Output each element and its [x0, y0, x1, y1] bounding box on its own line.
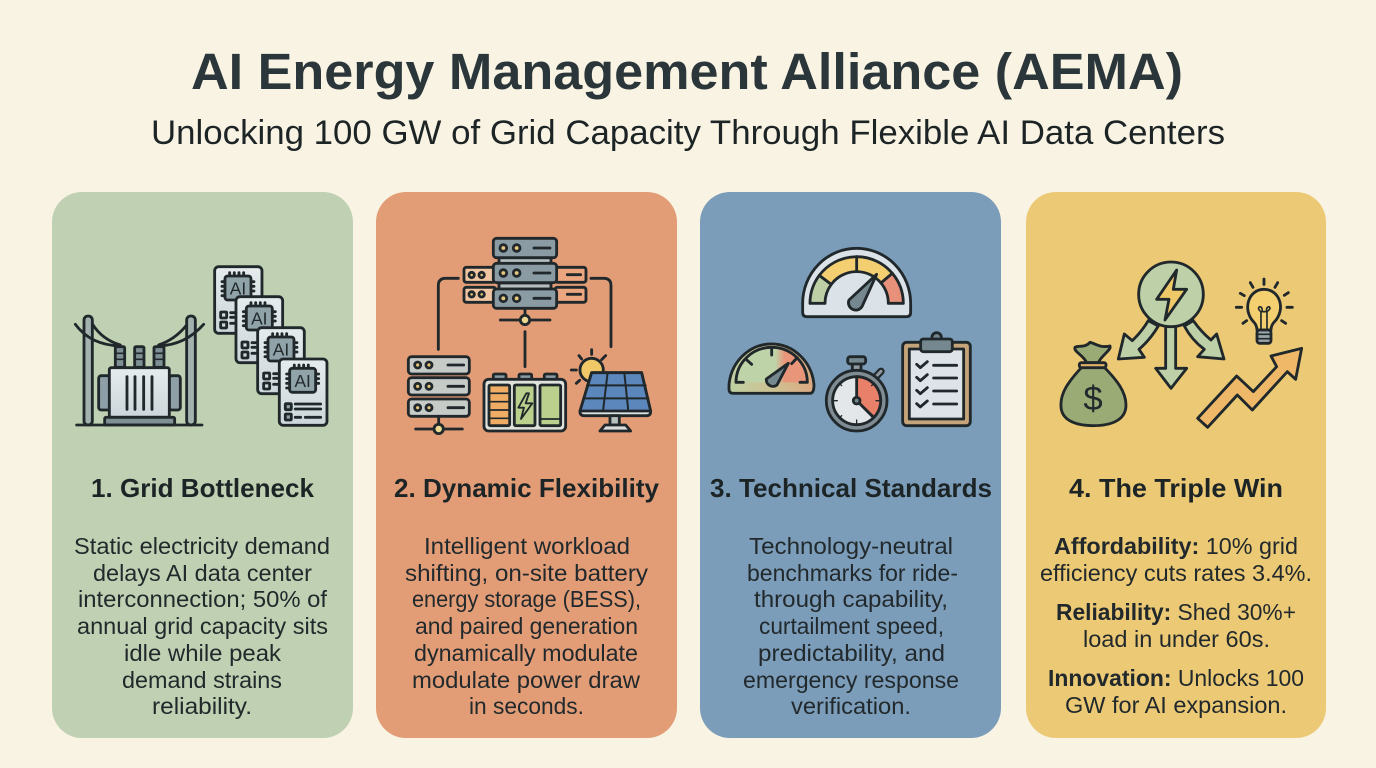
text: dynamic flexibility body: and paired generation	[415, 613, 638, 639]
icon: connection lines	[438, 278, 611, 367]
heading: the triple win: 4. The Triple Win	[1069, 473, 1283, 503]
icon: small gauge	[729, 344, 814, 393]
text: reliability: load in under 60s.	[1083, 626, 1270, 652]
icon: battery	[484, 374, 566, 431]
icon: gauges, stopwatch and clipboard	[729, 248, 970, 431]
text: dynamic flexibility body: in seconds.	[469, 693, 584, 719]
panel: technical standards	[700, 192, 1001, 738]
text: grid bottleneck body: delays AI data center	[93, 560, 312, 586]
panel: the triple win	[1026, 192, 1326, 738]
icon: transformer	[75, 316, 204, 425]
icon: energy, money, growth and idea	[1061, 262, 1302, 427]
text: dynamic flexibility body: Intelligent workload	[424, 533, 630, 559]
panel: grid bottleneck	[52, 192, 353, 738]
text: affordability	[1040, 533, 1312, 586]
icon: AI card 1	[215, 267, 262, 333]
icon: rising arrow	[1198, 348, 1302, 427]
text: grid bottleneck body: annual grid capacity sits	[77, 613, 328, 639]
text: technical standards body: curtailment speed,	[759, 613, 944, 639]
icon: AI card 3: AI	[273, 340, 289, 360]
text: technical standards body: benchmarks for ride-	[747, 560, 958, 586]
text: innovation	[1048, 665, 1304, 718]
text: dynamic flexibility body: dynamically modulate	[414, 640, 638, 666]
text: technical standards body: predictability, and	[758, 640, 945, 666]
text: grid bottleneck body: reliability.	[152, 693, 252, 719]
icon: light bulb	[1236, 279, 1292, 343]
icon: clipboard checklist	[903, 333, 970, 426]
heading: grid bottleneck: 1. Grid Bottleneck	[91, 473, 315, 503]
icon: AI card 1: AI	[230, 279, 246, 299]
icon: AI card 2: AI	[251, 309, 268, 329]
text: grid bottleneck body: Static electricity demand	[74, 533, 330, 559]
text: dynamic flexibility body: modulate power draw	[412, 667, 641, 693]
text: grid bottleneck body: idle while peak	[124, 640, 281, 666]
text: technical standards body: Technology-neutral	[749, 533, 953, 559]
text: technical standards body: emergency response	[743, 667, 959, 693]
text: technical standards body: through capability,	[754, 586, 948, 612]
text: innovation: Innovation: Unlocks 100	[1048, 665, 1304, 691]
icon: servers, battery and solar	[408, 238, 651, 434]
heading: technical standards: 3. Technical Standards	[710, 473, 992, 503]
text: grid bottleneck body	[74, 533, 330, 719]
text: innovation: GW for AI expansion.	[1065, 692, 1287, 718]
icon: AI card 4: AI	[294, 371, 311, 391]
icon: AI card 3	[258, 328, 304, 394]
text: affordability: Affordability: 10% grid	[1054, 533, 1298, 559]
text: technical standards body: verification.	[791, 693, 911, 719]
text: dynamic flexibility body: shifting, on-site battery	[405, 560, 648, 586]
icon: money bag: $	[1083, 380, 1103, 418]
subtitle: Unlocking 100 GW of Grid Capacity Through Flexible AI Data Centers	[151, 114, 1225, 152]
text: dynamic flexibility body	[405, 533, 648, 719]
text: technical standards body	[743, 533, 959, 719]
icon: small server stack	[408, 357, 469, 434]
text: reliability	[1056, 599, 1296, 652]
text: grid bottleneck body: demand strains	[122, 667, 282, 693]
icon: AI card 4	[279, 359, 327, 425]
icon: transformer and AI chip cards	[75, 267, 327, 425]
icon: stopwatch	[826, 357, 887, 431]
icon: energy circle with three arrows	[1118, 262, 1224, 388]
text: dynamic flexibility body: energy storage (BESS),	[412, 586, 641, 612]
icon: large gauge	[803, 248, 911, 317]
text: reliability: Reliability: Shed 30%+	[1056, 599, 1296, 625]
heading: dynamic flexibility: 2. Dynamic Flexibility	[394, 473, 660, 503]
icon: central server stack	[464, 238, 586, 325]
title: AI Energy Management Alliance (AEMA)	[191, 43, 1183, 100]
text: affordability: efficiency cuts rates 3.4%.	[1040, 560, 1312, 586]
icon: AI card 2	[236, 297, 283, 363]
icon: solar panel with sun	[571, 350, 651, 431]
text: grid bottleneck body: interconnection; 50% of	[78, 586, 327, 612]
panel: dynamic flexibility	[376, 192, 677, 738]
icon: money bag	[1061, 342, 1126, 426]
